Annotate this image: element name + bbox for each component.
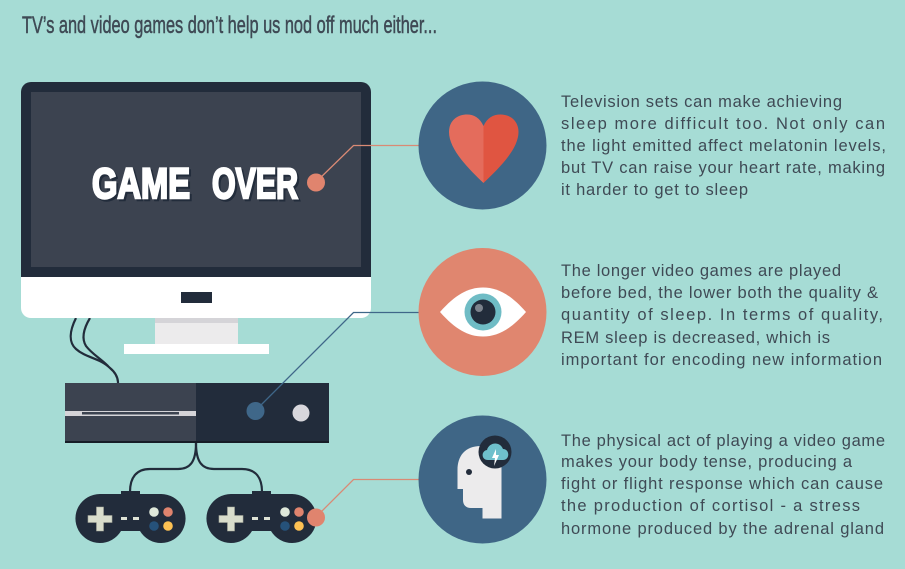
cables: monitor to console	[71, 318, 118, 383]
icon: eye	[418, 248, 546, 376]
game over text: OVER	[214, 162, 300, 210]
icon: head with storm cloud	[418, 416, 546, 544]
text: physical act	[561, 432, 885, 538]
text: television: it harder to get to sleep	[561, 181, 748, 199]
text: television: but TV can raise your heart rate, making	[561, 159, 885, 177]
connector: controller to head	[307, 480, 420, 526]
text: physical act: hormone produced by the adrenal gland	[561, 520, 884, 538]
game over text: GAME	[94, 162, 192, 210]
controller right	[206, 491, 317, 543]
console	[65, 383, 329, 443]
monitor	[21, 82, 371, 318]
text: television: the light emitted affect melatonin levels,	[561, 137, 886, 155]
controller cables	[130, 443, 262, 492]
game over text: OVER	[212, 160, 298, 208]
text: video games: quantity of sleep. In terms of quality,	[561, 306, 883, 324]
text: video games: important for encoding new information	[561, 351, 882, 369]
text: video games	[561, 262, 883, 369]
text: physical act: makes your body tense, producing a	[561, 453, 853, 471]
text: physical act: the production of cortisol - a stress	[561, 497, 860, 515]
text: television: Television sets can make achieving	[561, 93, 842, 111]
connector: monitor to heart	[307, 146, 420, 192]
game over text: GAME	[92, 160, 190, 208]
text: video games: before bed, the lower both the quality &	[561, 284, 878, 302]
text: physical act: The physical act of playing a video game	[561, 432, 885, 450]
monitor stand	[124, 317, 269, 354]
text: video games: REM sleep is decreased, which is	[561, 329, 830, 347]
game over text	[92, 160, 300, 210]
text: television	[561, 93, 886, 199]
icon: heart	[418, 82, 546, 210]
title: TV’s and video games don’t help us nod off much either...	[22, 12, 437, 39]
controller left	[75, 491, 186, 543]
text: video games: The longer video games are played	[561, 262, 841, 280]
text: television: sleep more difficult too. Not only can	[561, 115, 885, 133]
connector: console to eye	[246, 312, 420, 420]
text: physical act: fight or flight response which can cause	[561, 475, 883, 493]
